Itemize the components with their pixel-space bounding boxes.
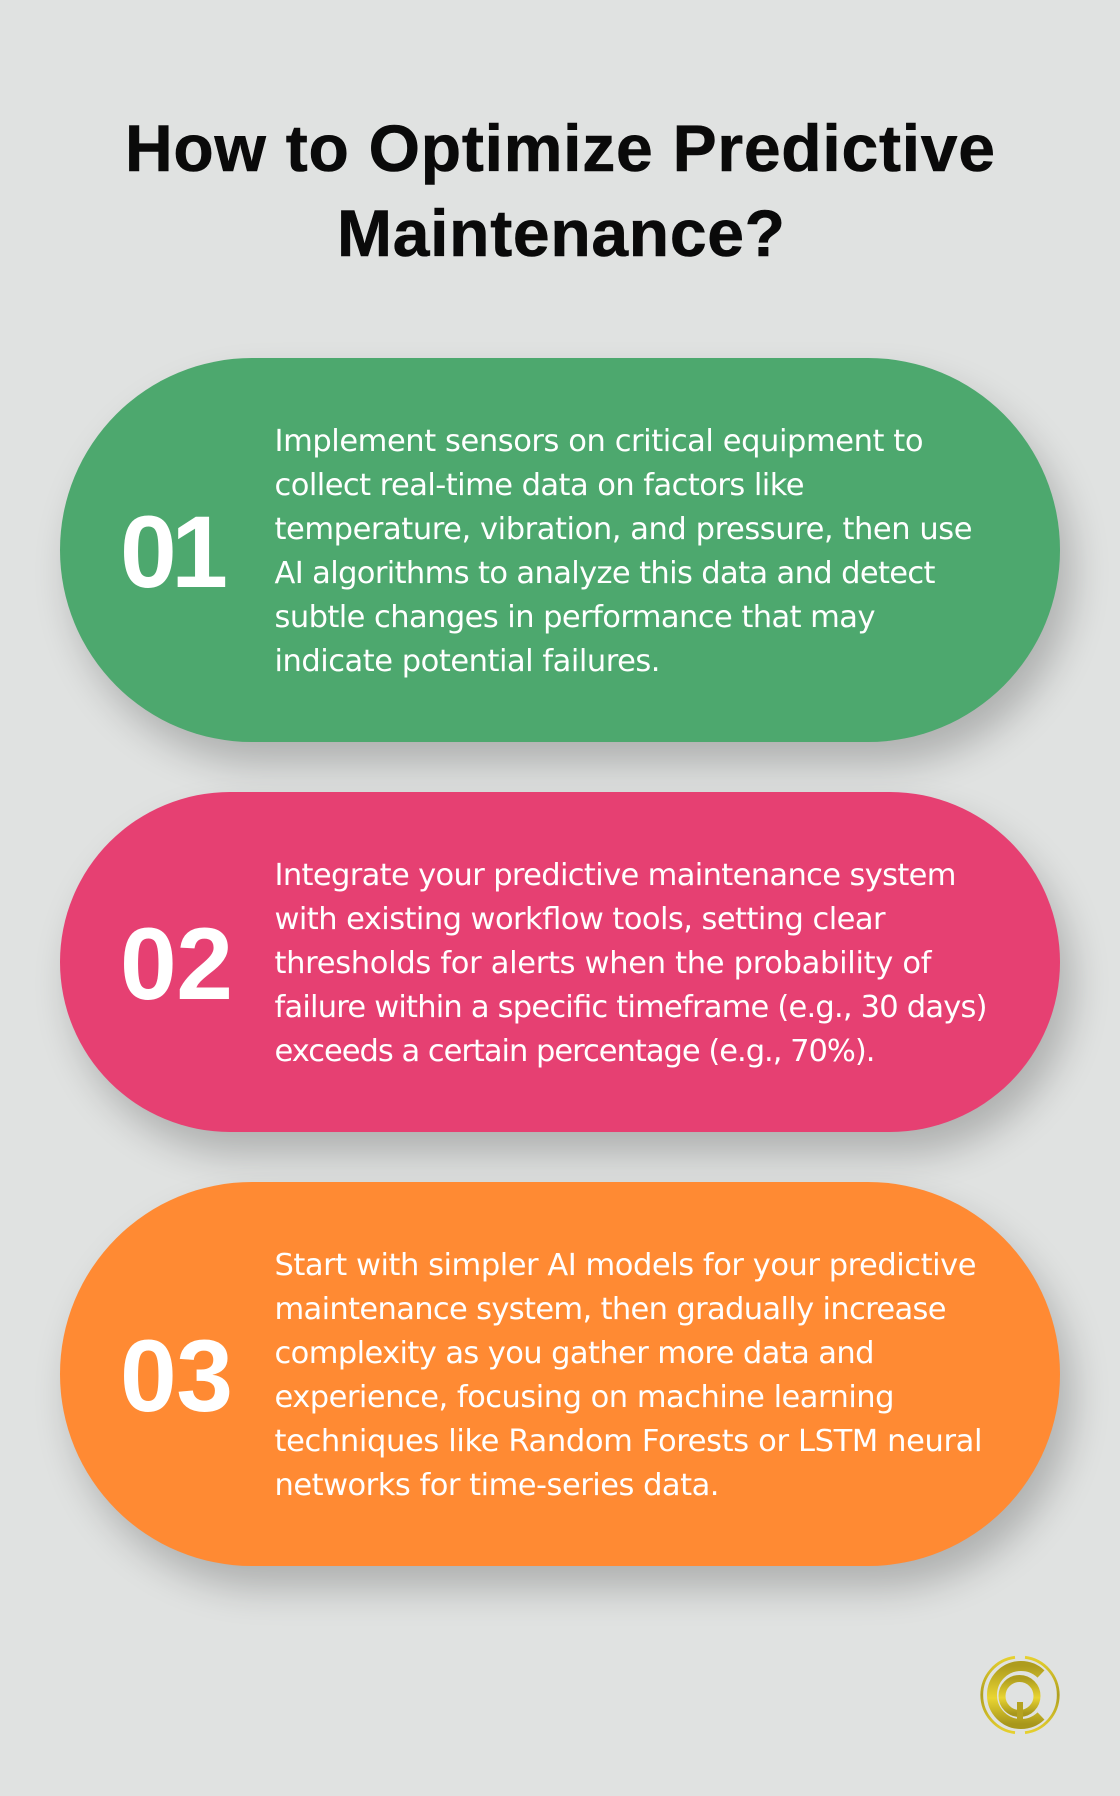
text: step 01 description: collect real-time data on factors like bbox=[274, 468, 804, 503]
text: step 03 description: techniques like Random Forests or LSTM neural bbox=[274, 1424, 982, 1459]
title: Maintenance? bbox=[337, 196, 785, 270]
text: step 01 description: indicate potential failures. bbox=[274, 644, 660, 679]
text: step 01 description: subtle changes in performance that may bbox=[274, 600, 876, 635]
text: step 03 description: maintenance system, then gradually increase bbox=[274, 1292, 946, 1327]
panel: step 02 bbox=[60, 792, 1060, 1132]
icon: gold logo bbox=[980, 1656, 1060, 1734]
text: step 02 description: failure within a specific timeframe (e.g., 30 days) bbox=[274, 990, 988, 1025]
text: step 03 description: networks for time-series data. bbox=[274, 1468, 720, 1503]
text: step 01 description bbox=[274, 424, 972, 679]
text: step 03 description: complexity as you gather more data and bbox=[274, 1336, 874, 1371]
text: step 02 description: with existing workflow tools, setting clear bbox=[274, 902, 886, 937]
text: step 02 description bbox=[274, 858, 988, 1069]
title bbox=[125, 111, 995, 270]
text: step 03 description bbox=[274, 1248, 982, 1503]
panel: step 01 bbox=[60, 358, 1060, 742]
text: step 02 description: exceeds a certain percentage (e.g., 70%). bbox=[274, 1034, 876, 1069]
text: step 01 description: AI algorithms to analyze this data and detect bbox=[274, 556, 936, 591]
text: step 02 description: thresholds for alerts when the probability of bbox=[274, 946, 933, 981]
number 01: 01 bbox=[120, 495, 228, 609]
number 03: 03 bbox=[120, 1319, 233, 1433]
text: step 03 description: experience, focusing on machine learning bbox=[274, 1380, 894, 1415]
text: step 01 description: temperature, vibration, and pressure, then use bbox=[274, 512, 972, 547]
number 02: 02 bbox=[120, 907, 233, 1021]
text: step 03 description: Start with simpler AI models for your predictive bbox=[274, 1248, 976, 1283]
panel: step 03 bbox=[60, 1182, 1060, 1566]
text: step 01 description: Implement sensors on critical equipment to bbox=[274, 424, 924, 459]
title: How to Optimize Predictive bbox=[125, 111, 995, 185]
text: step 02 description: Integrate your predictive maintenance system bbox=[274, 858, 956, 893]
